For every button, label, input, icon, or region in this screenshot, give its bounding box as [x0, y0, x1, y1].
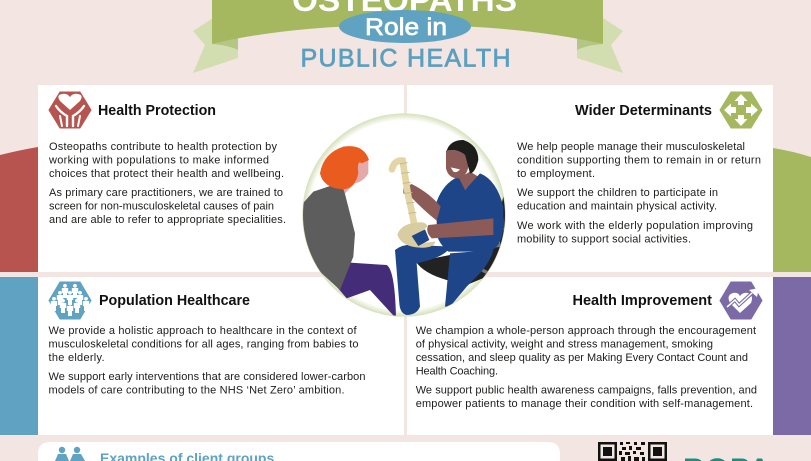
icon: heart with rising arrow [720, 282, 762, 319]
patient jacket [300, 186, 355, 290]
body text: of physical activity, weight and stress management, smoking [416, 338, 713, 350]
osteopath scrubs [437, 173, 503, 252]
body text [517, 141, 761, 246]
icon: client group [55, 447, 85, 461]
heading: Health Improvement [572, 292, 712, 309]
panel: population healthcare [38, 277, 404, 435]
panel: health protection [38, 85, 404, 272]
illustration: osteopath with patient in circle [300, 113, 507, 318]
body text: We support early interventions that are considered lower-carbon [48, 371, 366, 383]
model hand glove [412, 229, 429, 246]
ribbon fold: left [212, 38, 238, 50]
body text: We work with the elderly population improving [517, 220, 753, 232]
spine model [392, 161, 414, 223]
body text: We help people manage their musculoskeletal [517, 141, 745, 153]
body text: empower patients to manage their condition with self-management. [416, 398, 753, 410]
body text: screen for non-musculoskeletal causes of pain [49, 200, 274, 212]
ellipse badge [339, 10, 471, 43]
body text: education and maintain physical activity. [517, 200, 717, 212]
osteopath neck [459, 172, 478, 190]
body text: Osteopaths contribute to health protection by [49, 141, 278, 153]
icon: group of people [49, 282, 91, 319]
osteopath raised arm [403, 184, 441, 221]
subtitle: public health: PUBLIC HEALTH [300, 44, 510, 72]
body text: We support public health awareness campaigns, falls prevention, and [416, 384, 757, 396]
QR code [598, 442, 667, 461]
panel: health improvement [407, 277, 773, 435]
body text: choices that protect their health and wellbeing. [49, 168, 284, 180]
body text: We provide a holistic approach to healthcare in the context of [48, 325, 357, 337]
panel: wider determinants [407, 85, 773, 272]
side band: green [773, 148, 811, 272]
subtitle: role in: Role in [365, 14, 447, 41]
body text: working with populations to make informed [48, 154, 269, 166]
side band: red [0, 147, 38, 272]
title banner [193, 0, 623, 73]
heading: Population Healthcare [99, 292, 250, 309]
osteopath forearm [427, 218, 493, 238]
osteopath hair [447, 140, 478, 173]
body text [48, 141, 286, 226]
body text: musculoskeletal conditions for all ages, ranging from babies to [48, 338, 358, 350]
ribbon tail: left [193, 18, 238, 73]
panel: client groups [38, 442, 560, 461]
heading: Health Protection [98, 102, 216, 119]
osteopath legs [395, 245, 450, 315]
body text: Health Coaching. [416, 366, 498, 378]
body text: We champion a whole-person approach through the encouragement [416, 325, 756, 337]
body text: to employment. [517, 168, 595, 180]
body text: models of care contributing to the NHS ‘Net Zero’ ambition. [48, 384, 344, 396]
ribbon body [212, 0, 603, 44]
patient trousers [337, 263, 396, 318]
icon: four arrows [720, 92, 762, 128]
body text [48, 325, 366, 396]
side band: blue [0, 277, 38, 435]
body text: mobility to support social activities. [517, 234, 691, 246]
body text: and are able to refer to appropriate specialities. [49, 214, 286, 226]
patient hair [320, 146, 369, 189]
ribbon tail: right [577, 18, 623, 73]
smile [451, 167, 460, 172]
pelvis model [397, 222, 436, 248]
patient face [343, 160, 368, 193]
ribbon fold: right [577, 38, 603, 50]
body text [416, 325, 757, 410]
heading: Wider Determinants [575, 102, 712, 119]
body text: condition supporting them to remain in or return [517, 154, 761, 166]
icon: hands holding heart [49, 92, 91, 128]
osteopath face [446, 150, 468, 178]
body text: cessation, and sleep quality as per Making Every Contact Count and [416, 352, 748, 364]
body text: the elderly. [48, 352, 104, 364]
side band: purple [773, 277, 811, 435]
body text: As primary care practitioners, we are trained to [49, 187, 283, 199]
chair [416, 197, 507, 285]
body text: We support the children to participate in [517, 187, 718, 199]
